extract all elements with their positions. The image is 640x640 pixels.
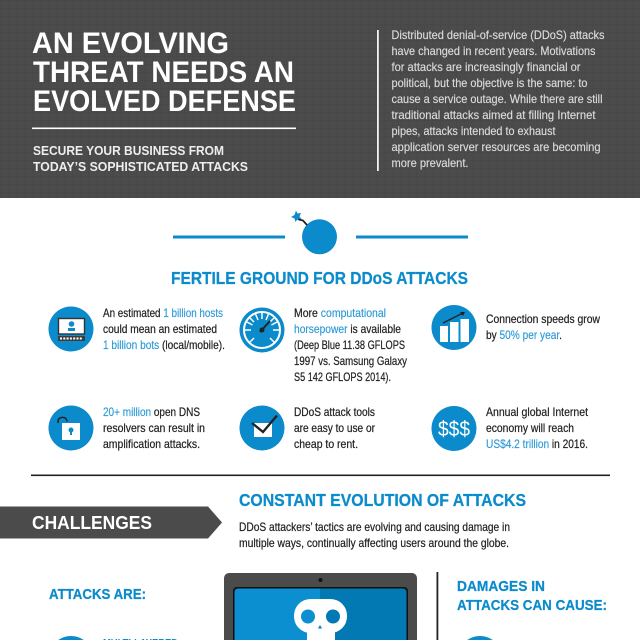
text xyxy=(486,405,589,451)
stat: connection speeds xyxy=(432,305,600,350)
intro paragraph: more prevalent. xyxy=(392,156,468,170)
text: evolution intro xyxy=(239,520,510,550)
text: economy will reach xyxy=(486,421,574,435)
stat: internet economy xyxy=(432,405,589,451)
text: DDoS attack tools xyxy=(294,405,375,419)
banner: challenges: CHALLENGES xyxy=(32,513,152,533)
title xyxy=(32,27,296,118)
icon: dollar signs xyxy=(432,406,476,451)
title: AN EVOLVING xyxy=(32,27,229,60)
text xyxy=(103,405,205,451)
intro paragraph: Distributed denial-of-service (DDoS) attacks xyxy=(392,28,604,42)
text xyxy=(486,312,600,342)
icon: rising bar chart xyxy=(432,305,476,350)
intro paragraph: have changed in recent years. Motivations xyxy=(392,44,596,58)
icon: open padlock xyxy=(48,406,94,450)
icon: dollar signs: $$$ xyxy=(438,418,470,441)
text: evolution intro: multiple ways, continually affecting users around the globe. xyxy=(239,536,509,550)
text: An estimated 1 billion hosts xyxy=(103,306,223,320)
text: Annual global Internet xyxy=(486,405,589,419)
icon: speedometer xyxy=(240,308,284,352)
icon: laptop with skull xyxy=(224,573,417,640)
intro paragraph: application server resources are becoming xyxy=(392,140,600,154)
text: S5 142 GFLOPS 2014). xyxy=(294,370,391,384)
icon: checkbox xyxy=(240,406,284,450)
text: by 50% per year. xyxy=(486,328,562,342)
text: resolvers can result in xyxy=(103,421,205,435)
icon: damages list circle xyxy=(467,636,493,640)
intro paragraph: cause a service outage. While there are still xyxy=(392,92,602,106)
intro paragraph xyxy=(392,28,604,170)
stat: billion hosts xyxy=(48,306,225,352)
heading: damages xyxy=(457,578,607,614)
text: cheap to rent. xyxy=(294,437,358,451)
text: US$4.2 trillion in 2016. xyxy=(486,437,588,451)
text xyxy=(294,306,407,384)
text: Connection speeds grow xyxy=(486,312,600,326)
icon: attacks list circle xyxy=(58,636,84,640)
header panel xyxy=(0,0,640,198)
text: 1997 vs. Samsung Galaxy xyxy=(294,354,407,368)
text: (Deep Blue 11.38 GFLOPS xyxy=(294,338,405,352)
text: amplification attacks. xyxy=(103,437,200,451)
banner: challenges xyxy=(0,506,222,538)
subtitle: SECURE YOUR BUSINESS FROM xyxy=(33,143,224,158)
heading: attacks are: ATTACKS ARE: xyxy=(49,586,146,603)
stat: attack tools xyxy=(240,405,375,451)
subtitle: TODAY’S SOPHISTICATED ATTACKS xyxy=(33,159,248,174)
text: 1 billion bots (local/mobile). xyxy=(103,338,225,352)
subtitle xyxy=(33,143,248,174)
title: THREAT NEEDS AN xyxy=(33,56,294,89)
title: EVOLVED DEFENSE xyxy=(33,85,296,118)
intro paragraph: political, but the objective is the same: to xyxy=(392,76,588,90)
text: More computational xyxy=(294,306,386,320)
text: 20+ million open DNS xyxy=(103,405,200,419)
icon: bomb divider xyxy=(173,210,468,254)
text xyxy=(294,405,375,451)
stat: open resolvers xyxy=(48,405,205,451)
intro paragraph: for attacks are increasingly financial or xyxy=(392,60,581,74)
heading: constant evolution: CONSTANT EVOLUTION OF ATTACKS xyxy=(239,490,526,510)
text: evolution intro: DDoS attackers’ tactics are evolving and causing damage in xyxy=(239,520,510,534)
text: could mean an estimated xyxy=(103,322,217,336)
text xyxy=(103,306,225,352)
text: horsepower is available xyxy=(294,322,401,336)
heading: fertile ground: FERTILE GROUND FOR DDoS ATTACKS xyxy=(171,268,468,288)
text: are easy to use or xyxy=(294,421,375,435)
heading: damages: ATTACKS CAN CAUSE: xyxy=(457,597,607,614)
intro paragraph: pipes, attacks intended to exhaust xyxy=(392,124,556,138)
heading: damages: DAMAGES IN xyxy=(457,578,545,595)
stat: computational horsepower xyxy=(240,306,407,384)
intro paragraph: traditional attacks aimed at filling Internet xyxy=(392,108,596,122)
icon: infected laptop xyxy=(48,306,94,352)
